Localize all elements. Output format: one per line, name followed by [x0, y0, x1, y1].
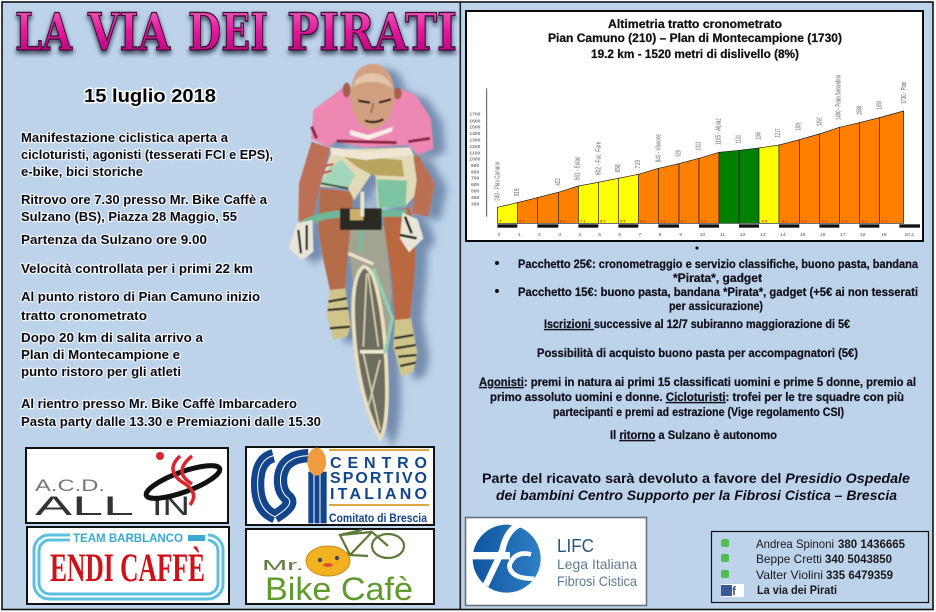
km axis labels: 0	[498, 232, 501, 238]
station labels: 422	[553, 178, 562, 186]
gradient labels: 9 4	[842, 219, 848, 224]
event details text block: Al rientro presso Mr. Bike Caffè Imbarcadero	[21, 396, 297, 411]
station labels: 1588	[855, 106, 864, 115]
event details text block: Al punto ristoro di Pian Camuno inizio	[21, 289, 260, 304]
station labels: 1166	[754, 132, 763, 140]
km axis labels: 17	[840, 232, 846, 238]
altitude axis labels: 1000	[469, 157, 481, 163]
text block: packages: per assicurazione)	[669, 301, 763, 313]
logo: Centro Sportivo Italiano: SPORTIVO	[330, 470, 427, 487]
event details text block: Ritrovo ore 7.30 presso Mr. Bike Caffè a	[21, 192, 268, 207]
gradient labels: 8 7	[681, 219, 687, 224]
text block: charity note	[482, 470, 910, 503]
event details text block: Partenza da Sulzano ore 9.00	[21, 232, 207, 247]
station labels: 1730 - Plan	[899, 82, 908, 104]
km axis labels: 9	[679, 232, 682, 238]
logo: Centro Sportivo Italiano: ITALIANO	[330, 486, 427, 503]
panel: altimetry chart	[466, 11, 923, 241]
altitude axis labels: 300	[471, 201, 480, 207]
altitude axis labels: 1300	[469, 137, 481, 143]
text block: packages	[495, 246, 919, 313]
event details text block: Manifestazione ciclistica aperta a	[21, 130, 229, 145]
station labels: 501 - Eulas	[573, 156, 582, 180]
gradient labels	[499, 219, 888, 224]
km axis labels: 13	[760, 232, 766, 238]
chart title: 19.2 km - 1520 metri di dislivello (8%)	[591, 49, 799, 61]
gradient labels: 5 1	[600, 219, 606, 224]
contact names and numbers: 340 5043850	[825, 552, 892, 566]
km axis labels: 16	[820, 232, 826, 238]
km axis labels: 6	[618, 232, 621, 238]
logo: A.C.D. All In: ALL	[35, 491, 134, 521]
logo: A.C.D. All In: IN	[152, 491, 190, 521]
text block: charity note: Parte del ricavato sarà devoluto a favore del Presidio Ospedale	[482, 470, 910, 486]
logo: A.C.D. All In: A.C.D.	[35, 476, 105, 495]
jersey	[311, 87, 433, 155]
contact names and numbers: La via dei Pirati	[757, 583, 837, 597]
text block: charity note: dei bambini Centro Supporto per la Fibrosi Cistica – Brescia	[496, 487, 897, 503]
km axis labels: 15	[800, 232, 806, 238]
station labels: 1013	[694, 142, 703, 151]
event details text block: Pasta party dalle 13.30 e Premiazioni dalle 15.30	[21, 414, 321, 429]
illustration: cyclist	[289, 64, 435, 438]
text block: registration notes: Iscrizioni successive al 12/7 subiranno maggiorazione di 5€	[544, 319, 851, 331]
station labels: 319	[512, 188, 521, 197]
event details text block: punto ristoro per gli atleti	[21, 364, 181, 379]
logo: LIFC: LIFC	[557, 536, 594, 556]
gradient labels: 8 1	[519, 219, 525, 224]
km axis labels: 5	[598, 232, 601, 238]
km axis labels: 12	[740, 232, 746, 238]
km axis labels: 7	[638, 232, 641, 238]
gradient labels: 5 5	[620, 219, 626, 224]
station labels: 658	[613, 164, 622, 172]
gradient labels: 9 2	[822, 219, 828, 224]
km axis labels: 10	[700, 232, 705, 238]
icon: facebook: f	[732, 584, 737, 598]
text block: packages: Pacchetto 25€: cronometraggio e servizio classifiche, buono pasta, bandana	[518, 259, 919, 271]
altitude axis labels: 1500	[469, 125, 481, 131]
panel: contacts	[712, 532, 928, 602]
logo: Centro Sportivo Italiano: CENTRO	[330, 455, 427, 472]
text block: prizes: partecipanti e premi ad estrazione (Vige regolamento CSI)	[553, 407, 844, 419]
event details text block: tratto cronometrato	[21, 308, 147, 323]
station labels: 602 - Fuc. Fare	[594, 142, 603, 175]
logo: Mr. Bike Cafè: Mr.	[262, 557, 304, 574]
gradient labels: 8 3	[802, 219, 808, 224]
event details text block: Velocità controllata per i primi 22 km	[21, 261, 253, 276]
station labels: 929	[674, 150, 683, 157]
altitude axis labels: 1700	[469, 112, 481, 118]
km axis labels: 3	[558, 232, 561, 238]
logo: A.C.D. All In	[26, 448, 228, 523]
contact names and numbers: Valter Violini	[756, 568, 823, 582]
icon: phone	[721, 570, 729, 578]
altitude axis labels: 1600	[469, 118, 481, 124]
logo: Team Barblanco Endi Caffè: ENDI CAFFÈ	[50, 545, 205, 590]
altitude axis labels: 500	[471, 189, 480, 195]
event details text block	[21, 130, 321, 429]
station labels: 1217	[773, 128, 782, 137]
gradient labels: 8 8	[560, 219, 566, 224]
logo: Team Barblanco Endi Caffè: TEAM BARBLANCO	[73, 531, 183, 545]
wheel	[353, 267, 387, 438]
logo: LIFC: Lega Italiana	[557, 556, 637, 572]
station labels: 1490 - Prato Secondino	[834, 75, 843, 120]
km axis labels: 14	[780, 232, 786, 238]
chart title	[548, 19, 842, 61]
km bar	[497, 224, 920, 228]
chart title: Pian Camuno (210) – Plan di Montecampione (1730)	[548, 33, 842, 45]
contact names and numbers: Beppe Cretti	[756, 552, 822, 566]
logo: Centro Sportivo Italiano	[246, 447, 434, 525]
station labels: 240 - Pian Camuno	[493, 162, 502, 201]
icon: phone	[721, 539, 729, 547]
logo: Centro Sportivo Italiano: Comitato di Brescia	[329, 513, 428, 525]
icon: facebook	[721, 584, 744, 598]
contact names and numbers: 380 1436665	[838, 537, 905, 551]
gradient labels: 8 1	[882, 219, 888, 224]
bike frame background	[345, 227, 392, 350]
date: 15 luglio 2018	[84, 86, 216, 106]
event details text block: cicloturisti, agonisti (tesserati FCI e EPS),	[21, 147, 273, 162]
station labels: 1105 - Alpiaz	[714, 118, 723, 145]
text block: prizes	[479, 377, 916, 442]
contact names and numbers: Andrea Spinoni	[756, 537, 834, 551]
text block: prizes: Il ritorno a Sulzano è autonomo	[610, 430, 777, 442]
contact names and numbers: 335 6479359	[826, 568, 893, 582]
gradient labels: 8 2	[782, 219, 788, 224]
title: LA	[15, 3, 73, 63]
text block: prizes: primo assoluto uomini e donne. Cicloturisti: trofei per le tre squadre con più	[490, 392, 904, 404]
altitude axis labels: 1200	[469, 144, 481, 150]
station labels: 1659	[875, 101, 884, 109]
km axis labels: 2	[538, 232, 541, 238]
altitude axis labels: 700	[471, 176, 480, 182]
logo: LIFC	[466, 518, 646, 606]
elevation profile	[469, 75, 920, 238]
event details text block: Sulzano (BS), Piazza 28 Maggio, 55	[21, 209, 237, 224]
gloves	[289, 220, 313, 260]
gradient labels: 7 1	[580, 219, 586, 224]
station labels: 1392	[815, 117, 824, 126]
gradient labels: 7 9	[660, 219, 666, 224]
text block: packages: Pacchetto 15€: buono pasta, bandana *Pirata*, gadget (+5€ ai non tesserati	[518, 287, 918, 299]
km axis labels: 20.2	[904, 232, 914, 238]
handlebar	[300, 213, 407, 226]
logo: LIFC: Fibrosi Cistica	[557, 573, 637, 589]
text block: packages: *Pirata*, gadget	[673, 273, 762, 285]
km axis labels: 1	[518, 232, 521, 238]
station labels: 719	[633, 160, 642, 168]
station labels: 1309	[794, 123, 803, 131]
logo: Mr. Bike Cafè: Bike Cafè	[265, 571, 413, 607]
text block: registration notes	[537, 319, 858, 360]
shorts	[320, 147, 417, 208]
arms	[298, 142, 330, 222]
altitude axis labels: 1100	[469, 150, 480, 156]
altitude axis labels	[469, 112, 481, 207]
event details text block: Dopo 20 km di salita arrivo a	[21, 330, 204, 345]
km axis labels: 4	[578, 232, 581, 238]
text block: prizes: Agonisti: premi in natura ai primi 15 classificati uomini e prime 5 donne, premio al	[479, 377, 916, 389]
contact names and numbers	[756, 537, 905, 597]
gradient labels: 8 2	[862, 219, 868, 224]
altitude axis labels: 900	[471, 163, 480, 169]
title: VIA	[87, 3, 171, 63]
altitude axis labels: 450	[471, 195, 480, 201]
gradient labels: 7	[499, 219, 502, 224]
station labels	[493, 75, 908, 201]
event details text block: Plan di Montecampione e	[21, 347, 180, 362]
km axis labels	[498, 232, 914, 238]
altitude axis labels: 1400	[469, 131, 481, 137]
station labels: 1131	[734, 135, 743, 143]
shoes	[327, 288, 351, 340]
event details text block: e-bike, bici storiche	[21, 164, 143, 179]
icon: phone	[721, 554, 729, 562]
station labels: 840 - Vissone	[654, 134, 663, 162]
km axis labels: 11	[720, 232, 725, 238]
title: PIRATI	[287, 3, 457, 63]
altitude axis labels: 800	[471, 169, 480, 175]
gradient labels: 6 8	[640, 219, 646, 224]
legs	[318, 188, 353, 290]
logo: Mr. Bike Cafè	[246, 529, 434, 607]
text block: registration notes: Possibilità di acquisto buono pasta per accompagnatori (5€)	[537, 348, 858, 360]
km axis labels: 19	[881, 232, 887, 238]
km axis labels: 18	[860, 232, 866, 238]
chart title: Altimetria tratto cronometrato	[608, 19, 782, 31]
title: DEI	[188, 3, 268, 63]
logo: Team Barblanco Endi Caffè	[27, 527, 229, 604]
title	[15, 3, 457, 63]
gradient labels: 4 8	[762, 219, 768, 224]
gradient labels: 8 4	[701, 219, 707, 224]
altitude axis labels: 600	[471, 182, 480, 188]
km axis labels: 8	[659, 232, 662, 238]
head	[343, 83, 351, 97]
